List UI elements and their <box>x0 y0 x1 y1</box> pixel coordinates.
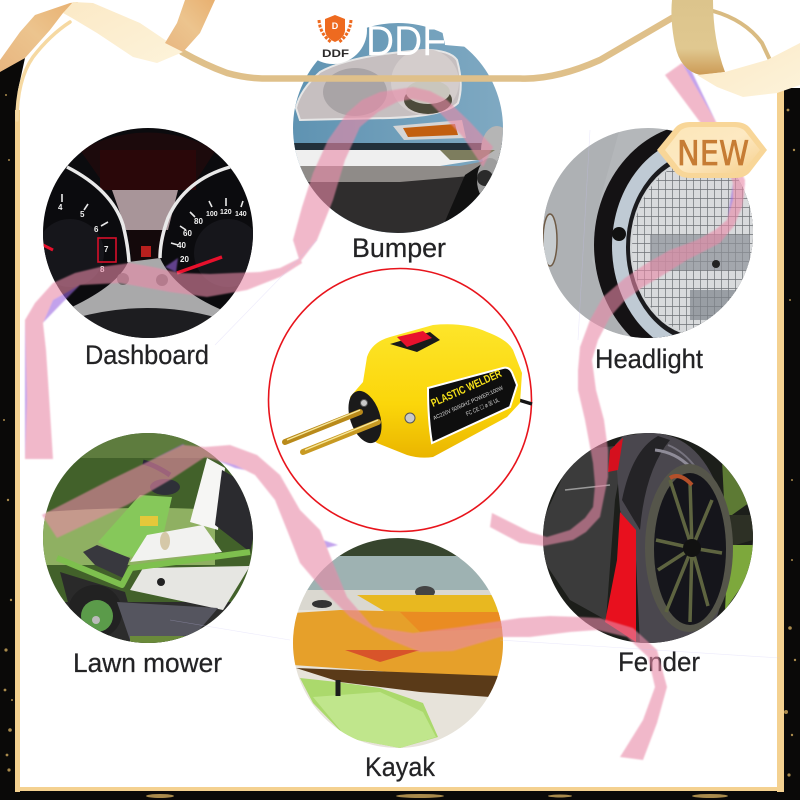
photo circle: bumper <box>293 23 513 236</box>
pin lower <box>303 422 378 452</box>
photo circle: dashboard: 140 <box>235 211 247 218</box>
front face <box>342 387 388 447</box>
center red circle <box>268 268 532 532</box>
logo backing patch <box>299 0 520 64</box>
photo circle: dashboard: 8 <box>100 265 105 274</box>
photo circle: dashboard: 7 <box>104 245 109 254</box>
ribbon purple backing <box>25 63 745 548</box>
plate certification marks: FC CE ☐ ⌀ ☒ UL <box>465 397 501 418</box>
ghost watermark: DDF: DDF <box>366 17 446 64</box>
switch base <box>390 332 440 352</box>
label: Bumper: Bumper <box>352 233 446 263</box>
photo circle: fender <box>543 433 753 645</box>
photo circle: lawn mower <box>43 433 255 644</box>
label: Headlight: Headlight <box>595 344 703 374</box>
photo circle: dashboard: 20 <box>180 255 189 264</box>
welder body <box>350 324 522 458</box>
photo circle: headlight <box>543 128 753 338</box>
pink ribbon overlay <box>25 63 745 760</box>
product: plastic welder <box>285 324 532 458</box>
photo circle: dashboard: 120 <box>220 209 232 216</box>
photo circle: dashboard <box>36 128 262 338</box>
gold ribbon: top-right fold <box>671 0 800 97</box>
photo circle: dashboard: 100 <box>206 211 218 218</box>
photo circle: dashboard: 6 <box>94 225 99 234</box>
photo circle: kayak <box>293 538 505 748</box>
label plate <box>428 368 517 443</box>
label: Fender: Fender <box>618 647 700 677</box>
new badge <box>657 122 767 178</box>
gold ribbon: top-left fold <box>0 0 215 72</box>
new badge: NEW <box>677 134 749 174</box>
logo: DDF shield: DDF <box>322 48 349 60</box>
gold ribbon: top line <box>17 11 770 120</box>
label: Dashboard: Dashboard <box>85 340 209 370</box>
photo circle: dashboard: 5 <box>80 210 85 219</box>
logo: DDF shield: D <box>332 21 339 31</box>
logo: DDF shield <box>319 15 351 60</box>
photo circle: dashboard: 4 <box>58 203 63 212</box>
photo circle: dashboard: 60 <box>183 229 192 238</box>
plate spec line: AC220V 50/60HZ POWER:100W <box>432 385 505 422</box>
cable <box>512 398 532 404</box>
photo circle: dashboard: 40 <box>177 241 186 250</box>
pin upper <box>285 412 360 442</box>
faint guide lines <box>170 130 780 658</box>
label: Kayak: Kayak <box>365 752 435 782</box>
plate title: PLASTIC WELDER <box>429 368 504 410</box>
label: Lawn mower: Lawn mower <box>73 648 222 678</box>
red switch <box>397 331 432 347</box>
screws <box>360 400 415 423</box>
ribbon pink bands <box>25 63 745 760</box>
photo circle: dashboard: 80 <box>194 217 203 226</box>
